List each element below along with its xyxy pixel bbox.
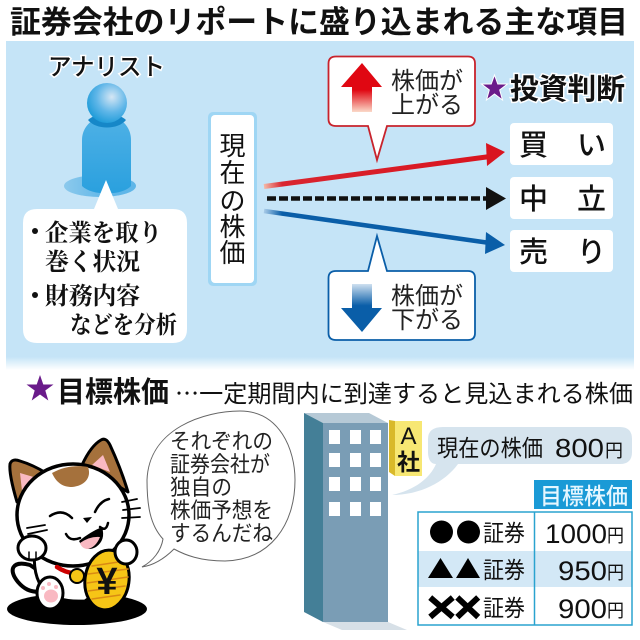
speech bubble: cat xyxy=(142,411,295,567)
row: firm 3: 証券 xyxy=(483,595,525,621)
row: firm 2: 円 xyxy=(607,563,624,583)
label: sell: 売 xyxy=(519,236,548,269)
heading: investment judgement: 投資判断 xyxy=(510,73,625,106)
row: firm 3: 円 xyxy=(607,601,624,621)
mouth xyxy=(79,527,103,549)
box: current stock price: 現 xyxy=(219,131,246,161)
row: firm 2 xyxy=(428,556,624,586)
row: firm 1 xyxy=(430,519,624,549)
callout: analysis items xyxy=(23,180,187,343)
icon: down arrow xyxy=(341,284,382,332)
ears xyxy=(10,460,46,502)
heading: target price: 目標株価 xyxy=(57,376,169,409)
coin xyxy=(81,547,133,613)
callout: price falls xyxy=(328,236,475,340)
label: sell: り xyxy=(577,237,606,269)
arrow: price rises to buy xyxy=(264,143,505,186)
illustration: lucky cat: ¥ xyxy=(96,561,118,603)
text: target price definition: …一定期間内に到達すると見込まれる株価 xyxy=(175,374,633,409)
box: current stock price: 在 xyxy=(219,158,246,188)
foot xyxy=(37,577,63,609)
body xyxy=(34,545,120,601)
panel: analyst to investment judgement xyxy=(6,41,634,370)
callout: price rises xyxy=(328,56,475,160)
head xyxy=(17,464,129,566)
label: neutral: 中 xyxy=(519,183,548,216)
callout: analysis items: などを分析 xyxy=(70,311,177,339)
illustration: lucky cat xyxy=(7,439,147,625)
box: current stock price: の xyxy=(219,186,246,216)
label: buy: 買 xyxy=(519,130,548,162)
row: firm 1: 1000 xyxy=(545,519,607,549)
whiskers xyxy=(27,499,140,534)
row: firm 1: 証券 xyxy=(483,520,525,546)
box: current stock price xyxy=(208,112,257,286)
callout: current price 800 yen xyxy=(392,427,632,495)
box: current stock price: 価 xyxy=(219,238,246,268)
callout: price rises: 上がる xyxy=(391,92,463,119)
row: firm 1: 円 xyxy=(607,526,624,546)
sign: company A: 社 xyxy=(397,449,420,475)
heading: analyst: アナリスト xyxy=(48,54,165,81)
table header: 目標株価 xyxy=(540,483,628,509)
label: neutral xyxy=(510,177,613,219)
paws xyxy=(18,536,46,560)
label: buy: い xyxy=(577,130,606,162)
collar and bell xyxy=(57,567,74,573)
row: firm 3 xyxy=(432,594,624,624)
callout: current price 800 yen: 円 xyxy=(605,441,623,461)
callout: price rises: 株価が xyxy=(391,68,463,95)
face xyxy=(50,499,109,518)
table: target prices xyxy=(418,480,632,625)
arrow: price falls to sell xyxy=(264,211,505,254)
speech bubble: cat: それぞれの xyxy=(170,429,273,454)
callout: analysis items: 巻く状況 xyxy=(45,249,140,276)
speech bubble: cat: 株価予想を xyxy=(170,498,273,523)
tail xyxy=(13,564,45,592)
sign: company A xyxy=(389,420,422,476)
callout: current price 800 yen: 現在の株価 xyxy=(437,435,543,461)
label: neutral: 立 xyxy=(577,183,606,216)
label: buy xyxy=(510,123,613,165)
icon: up arrow xyxy=(341,63,382,112)
row: firm 2: 950 xyxy=(558,556,607,586)
title: 証券会社のリポートに盛り込まれる主な項目 xyxy=(10,5,628,40)
floor shadow xyxy=(7,593,147,625)
callout: analysis items: 企業を取り xyxy=(45,220,162,247)
row: firm 2: 証券 xyxy=(483,557,525,583)
callout: price falls: 株価が xyxy=(391,283,463,310)
callout: current price 800 yen: 800 xyxy=(555,433,604,463)
arrow: neutral xyxy=(267,187,506,210)
head patch xyxy=(52,466,89,487)
row: firm 3: 900 xyxy=(558,594,607,624)
label: sell xyxy=(510,230,613,272)
callout: analysis items: 財務内容 xyxy=(45,283,140,310)
speech bubble: cat: 独自の xyxy=(170,475,232,500)
callout: price falls: 下がる xyxy=(391,307,463,334)
sign: company A: A xyxy=(400,423,417,450)
box: current stock price: 株 xyxy=(219,212,246,242)
illustration: building of company A xyxy=(304,413,422,630)
speech bubble: cat: 証券会社が xyxy=(170,452,270,477)
icon: analyst figure xyxy=(64,83,136,197)
speech bubble: cat: するんだね xyxy=(170,521,273,546)
